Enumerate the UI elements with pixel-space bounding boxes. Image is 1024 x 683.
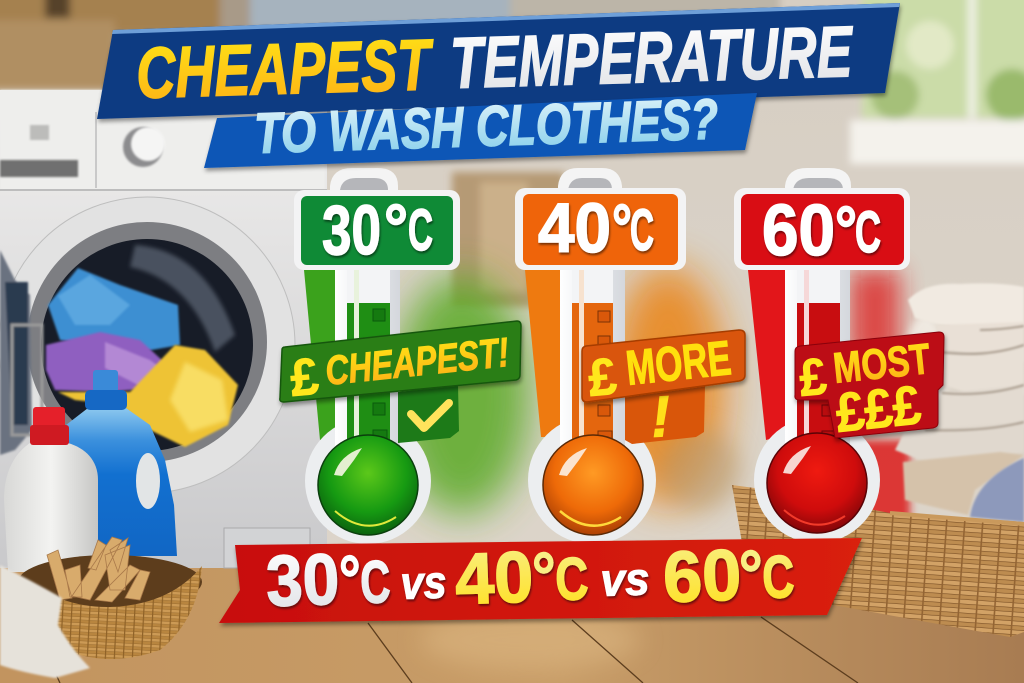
comparison text: C [554,545,589,613]
check box [398,385,459,443]
tube [560,260,625,450]
washer door ring [0,197,295,493]
label 30°C: 30 [322,191,381,269]
subtitle banner [204,87,757,168]
label 40°C: C [630,198,654,263]
exclamation box [625,385,705,444]
label 60°C: ° [835,192,857,266]
comparison text: vs [400,555,447,609]
temperature plate [734,188,910,270]
temperature plate [294,190,460,270]
orange beam behind tube [525,270,561,437]
background: wooden floor [0,565,1024,683]
bulb outer [754,417,880,543]
comparison text: C [359,548,391,616]
thermometer: 40°C [515,168,745,544]
bulb [767,433,867,533]
comparison text: 60 [662,535,743,618]
bulb outer [305,418,431,544]
label 30°C: C [408,198,433,263]
bulb [543,435,643,535]
comparison text: 40 [454,537,535,620]
comparison text: ° [531,538,558,615]
background: top shelf and baskets [0,0,780,90]
callout: cheapest [280,321,521,408]
comparison text: ° [338,541,363,618]
tube [335,260,400,450]
label 40°C: 40 [538,189,611,267]
callout: most £££: £££ [833,373,924,444]
comparison text: 30 [265,539,341,622]
tube [785,260,850,450]
title banner [97,3,900,119]
temperature plate [515,188,686,270]
tube cap [330,168,398,195]
comparison text [265,535,795,622]
bulb [318,435,418,535]
label 30°C: ° [384,190,408,264]
callout: most £££: MOST [831,335,933,393]
exclamation mark: ! [649,384,672,450]
peg basket with wooden pegs [17,537,202,659]
bottom comparison banner [219,535,862,623]
label 60°C [762,191,881,271]
stacked towels [895,283,1024,522]
callout: most £££: £ [797,348,829,408]
green beam behind tube [304,270,336,440]
label 60°C: C [855,200,881,265]
label 60°C: 60 [762,191,835,271]
white detergent bottle [4,407,98,572]
laundry inside the drum [46,268,238,447]
right laundry basket [732,485,1024,637]
washing machine [0,90,327,568]
title word: cheapest: CHEAPEST [135,25,436,114]
callout: more: MORE [624,331,734,396]
hanging clothes on door [0,250,42,455]
tube cap [785,168,851,195]
red beam behind tube [748,270,786,440]
blue detergent bottle [66,370,177,556]
background: wicker basket on back shelf [452,172,564,307]
label 40°C: ° [612,190,632,264]
comparison text: C [761,543,795,611]
bulb outer [528,416,656,544]
label 40°C [538,189,654,267]
comparison text: ° [738,536,765,613]
callout: more: £ [586,348,619,408]
callout: cheapest: £ [288,348,321,408]
cloth draped over basket [0,565,90,678]
callout: most £££ [795,332,944,444]
thermometer: 60°C [734,168,944,543]
title word: temperature: TEMPERATURE [449,12,855,104]
colour wash glows behind thermometers [394,265,947,535]
tick [411,403,449,428]
callout: cheapest: CHEAPEST! [323,329,511,394]
background: window with greenery [850,0,1024,164]
thermometer: 30°C [280,168,521,544]
callout: more [582,330,745,408]
label 30°C [322,190,433,269]
comparison text: vs [600,552,650,606]
subtitle text: TO WASH CLOTHES? [253,87,719,166]
tube cap [558,168,622,195]
